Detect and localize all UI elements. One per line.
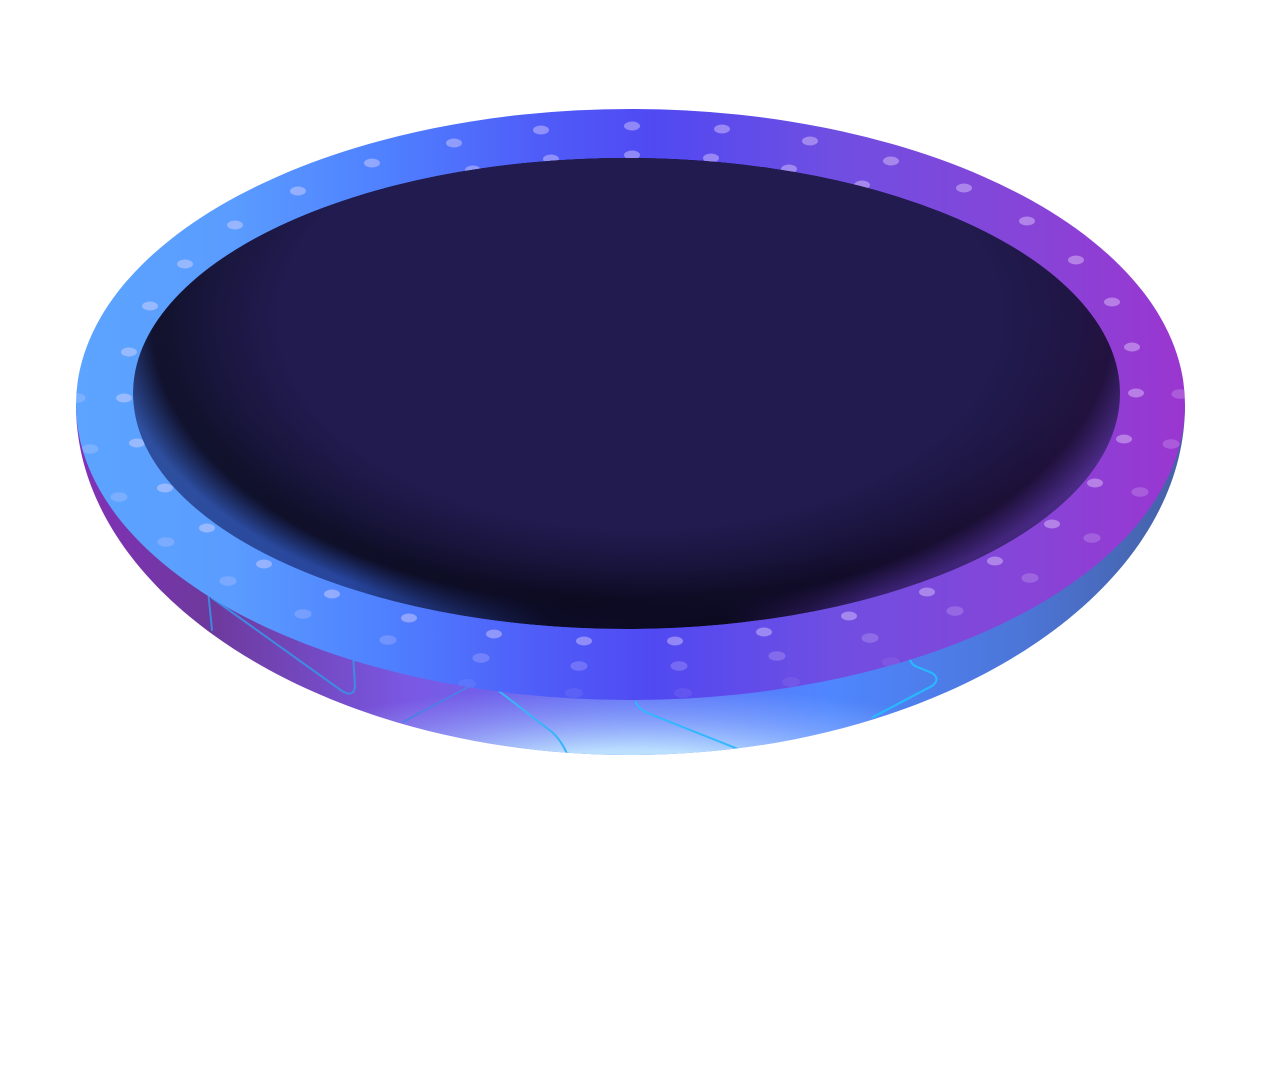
bowl outer wall	[76, 406, 1185, 755]
bowl illustration	[76, 109, 1185, 755]
rim dots	[68, 122, 1188, 698]
rim top surface	[76, 109, 1185, 700]
interior flat floor	[186, 158, 1084, 588]
dots: middle ring	[68, 150, 1188, 671]
interior dark shadow band	[120, 150, 1130, 640]
bottom highlight glow	[371, 695, 885, 755]
circuit lines on outer wall	[208, 590, 936, 756]
dots: inner ring	[116, 122, 1144, 646]
interior lit edge	[133, 158, 1120, 629]
bowl interior	[120, 150, 1130, 640]
dots: outer faint ring	[458, 657, 900, 698]
